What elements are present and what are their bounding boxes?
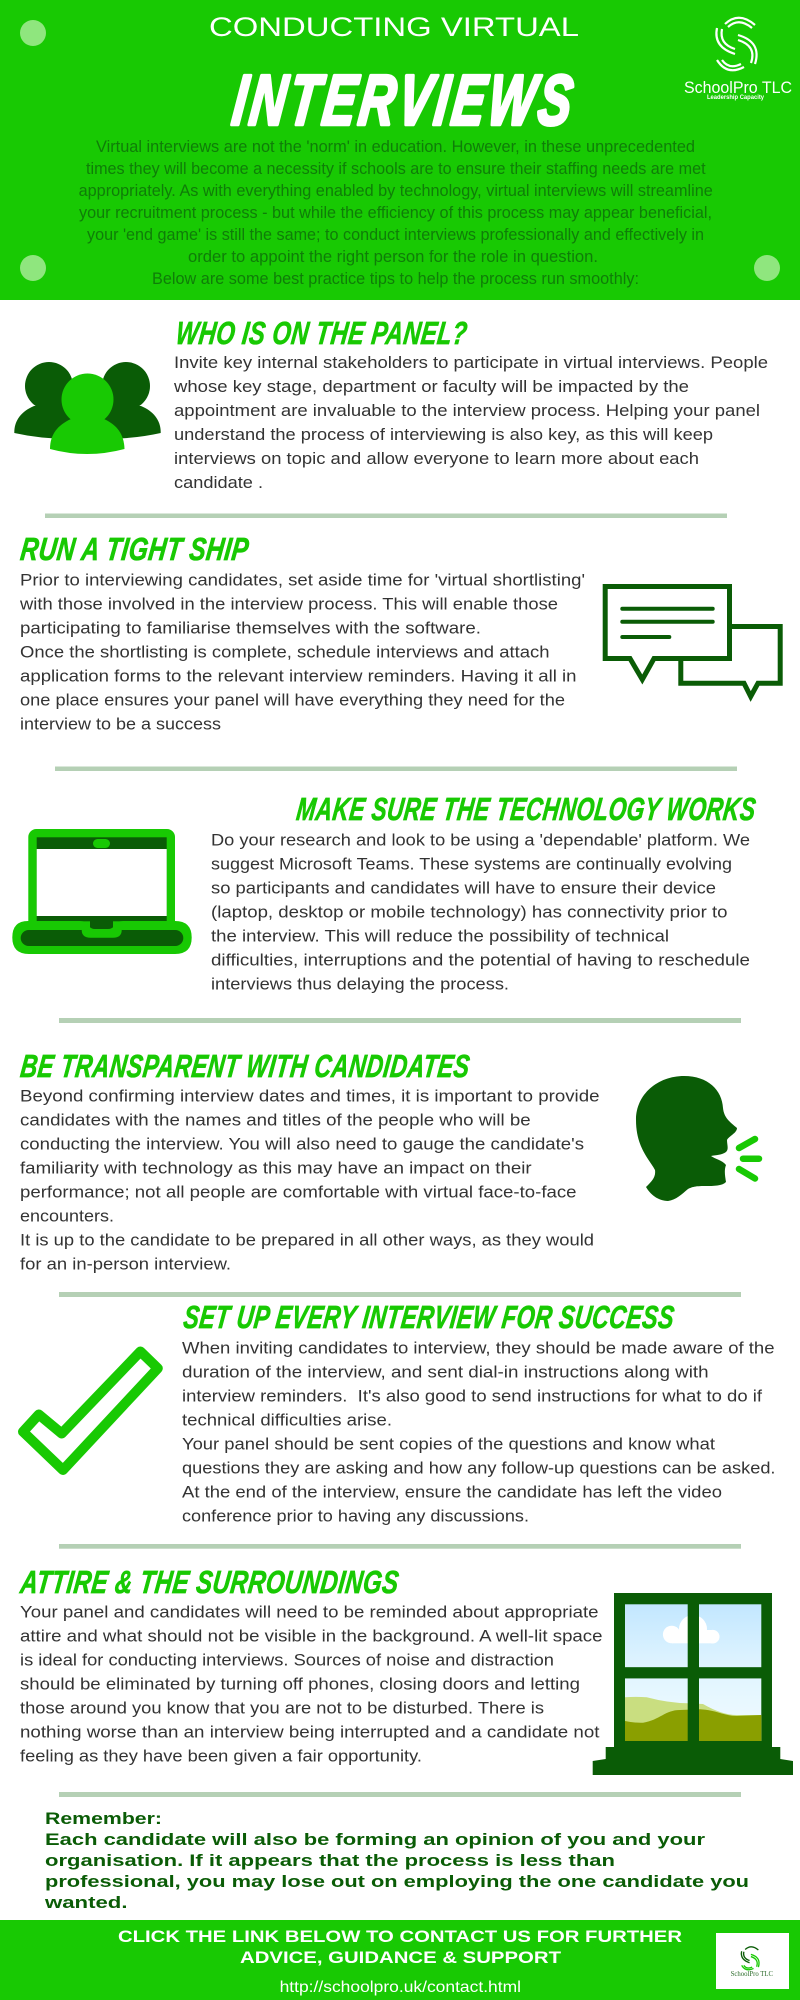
body text: technical difficulties arise. [182, 1411, 392, 1429]
heading: RUN A TIGHT SHIP [19, 531, 251, 567]
body text: It is up to the candidate to be prepared in all other ways, as they would [20, 1231, 594, 1249]
intro text: appropriately. As with everything enabled by technology, virtual interviews will streamline [79, 181, 713, 200]
intro text: your 'end game' is still the same; to conduct interviews professionally and effectively in [87, 225, 704, 244]
icon: speech bubbles [605, 586, 780, 696]
body text: feeling as they have been given a fair opportunity. [20, 1747, 422, 1765]
body text: performance; not all people are comfortable with virtual face-to-face [20, 1183, 576, 1201]
panel: set up every interview for success [23, 1299, 776, 1525]
body text: so participants and candidates will have to ensure their device [211, 879, 716, 897]
body text: one place ensures your panel will have everything they need for the [20, 691, 565, 709]
panel: run a tight ship [19, 531, 780, 733]
intro text: times they will become a necessity if schools are to ensure their staffing needs are met [86, 159, 706, 178]
body text: is ideal for conducting interviews. Sources of noise and distraction [20, 1651, 554, 1669]
call to action: CLICK THE LINK BELOW TO CONTACT US FOR FURTHER [118, 1928, 682, 1946]
logo: SchoolPro TLC: Leadership Capacity [707, 94, 764, 101]
title: conducting virtual: CONDUCTING VIRTUAL [209, 12, 579, 42]
icon: group of people [14, 362, 161, 454]
body text: Once the shortlisting is complete, schedule interviews and attach [20, 643, 550, 661]
body text: familiarity with technology as this may have an impact on their [20, 1159, 532, 1177]
body text [211, 831, 750, 993]
body text: (laptop, desktop or mobile technology) has connectivity prior to [211, 903, 728, 921]
body text: encounters. [20, 1207, 114, 1225]
heading: BE TRANSPARENT WITH CANDIDATES [19, 1048, 472, 1084]
body text: those around you know that you are not to be disturbed. There is [20, 1699, 544, 1717]
call to action [118, 1928, 682, 1967]
body text: for an in-person interview. [20, 1255, 231, 1273]
intro text: order to appoint the right person for the role in question. [188, 247, 598, 266]
logo: SchoolPro TLC [684, 18, 792, 101]
callout: remember: professional, you may lose out on employing the one candidate you [45, 1873, 749, 1891]
body text: interview to be a success [20, 715, 221, 733]
hills [625, 1697, 761, 1741]
body text: Your panel and candidates will need to be reminded about appropriate [20, 1603, 598, 1621]
body text: interviews on topic and allow everyone to learn more about each [174, 450, 699, 468]
logo box [716, 1933, 789, 1989]
heading: ATTIRE & THE SURROUNDINGS [18, 1564, 401, 1600]
intro text: Below are some best practice tips to help the process run smoothly: [152, 269, 639, 288]
panel: header [0, 0, 800, 300]
panel: who is on the panel [14, 315, 768, 492]
intro text [79, 137, 713, 288]
panel: be transparent with candidates [19, 1048, 759, 1273]
body text: should be eliminated by turning off phones, closing doors and letting [20, 1675, 580, 1693]
body text [173, 354, 768, 492]
decorative corner dots [20, 20, 780, 281]
panel: footer [0, 1920, 800, 2000]
body text [182, 1339, 776, 1525]
body text: understand the process of interviewing is also key, as this will keep [174, 426, 713, 444]
callout: remember: Remember: [45, 1810, 162, 1828]
body text: with those involved in the interview process. This will enable those [19, 595, 558, 613]
body text: interviews thus delaying the process. [211, 975, 509, 993]
body text: Your panel should be sent copies of the questions and know what [182, 1435, 715, 1453]
icon: check mark [23, 1352, 158, 1470]
body text: conference prior to having any discussions. [182, 1507, 529, 1525]
body text: Do your research and look to be using a 'dependable' platform. We [211, 831, 750, 849]
body text: At the end of the interview, ensure the candidate has left the video [182, 1483, 722, 1501]
body text [20, 1603, 602, 1765]
icon: window [593, 1593, 793, 1775]
body text: application forms to the relevant interview reminders. Having it all in [20, 667, 576, 685]
logo: SchoolPro TLC: SchoolPro TLC [684, 78, 792, 97]
title: interviews: INTERVIEWS [229, 61, 580, 140]
body text: whose key stage, department or faculty will be impacted by the [173, 378, 689, 396]
icon: laptop [12, 829, 192, 954]
body text: difficulties, interruptions and the potential of having to reschedule [211, 951, 750, 969]
body text: the interview. This will reduce the possibility of technical [211, 927, 669, 945]
cloud [663, 1615, 720, 1643]
body text: participating to familiarise themselves with the software. [20, 619, 481, 637]
intro text: Virtual interviews are not the 'norm' in education. However, in these unprecedented [96, 137, 695, 156]
callout: remember [44, 1810, 749, 1912]
body text: conducting the interview. You will also need to gauge the candidate's [20, 1135, 584, 1153]
callout: remember: wanted. [44, 1894, 128, 1912]
intro text: your recruitment process - but while the efficiency of this process may appear beneficial, [79, 203, 712, 222]
panel: make sure the technology works [12, 791, 758, 993]
body text: When inviting candidates to interview, they should be made aware of the [182, 1339, 774, 1357]
body text: candidate . [174, 474, 263, 492]
body text: candidates with the names and titles of the people who will be [20, 1111, 531, 1129]
callout: remember: Each candidate will also be forming an opinion of you and your [45, 1831, 706, 1849]
logo box: SchoolPro TLC [731, 1970, 773, 1978]
body text: appointment are invaluable to the interview process. Helping your panel [174, 402, 760, 420]
body text: suggest Microsoft Teams. These systems are continually evolving [211, 855, 732, 873]
contact link: http://schoolpro.uk/contact.html [280, 1979, 521, 1996]
body text: attire and what should not be visible in the background. A well-lit space [20, 1627, 602, 1645]
body text: Prior to interviewing candidates, set aside time for 'virtual shortlisting' [20, 571, 585, 589]
body text: Invite key internal stakeholders to participate in virtual interviews. People [174, 354, 768, 372]
body text: duration of the interview, and sent dial-in instructions along with [182, 1363, 709, 1381]
body text: interview reminders. It's also good to send instructions for what to do if [182, 1387, 762, 1405]
icon: speaking head [636, 1076, 759, 1201]
panel: attire and the surroundings [18, 1564, 793, 1775]
body text: nothing worse than an interview being interrupted and a candidate not [20, 1723, 600, 1741]
callout: remember: organisation. If it appears that the process is less than [45, 1852, 615, 1870]
heading: WHO IS ON THE PANEL? [174, 315, 470, 351]
body text: Beyond confirming interview dates and times, it is important to provide [20, 1087, 600, 1105]
body text [19, 571, 585, 733]
body text [20, 1087, 600, 1273]
call to action: ADVICE, GUIDANCE & SUPPORT [240, 1949, 561, 1967]
body text: questions they are asking and how any follow-up questions can be asked. [182, 1459, 776, 1477]
